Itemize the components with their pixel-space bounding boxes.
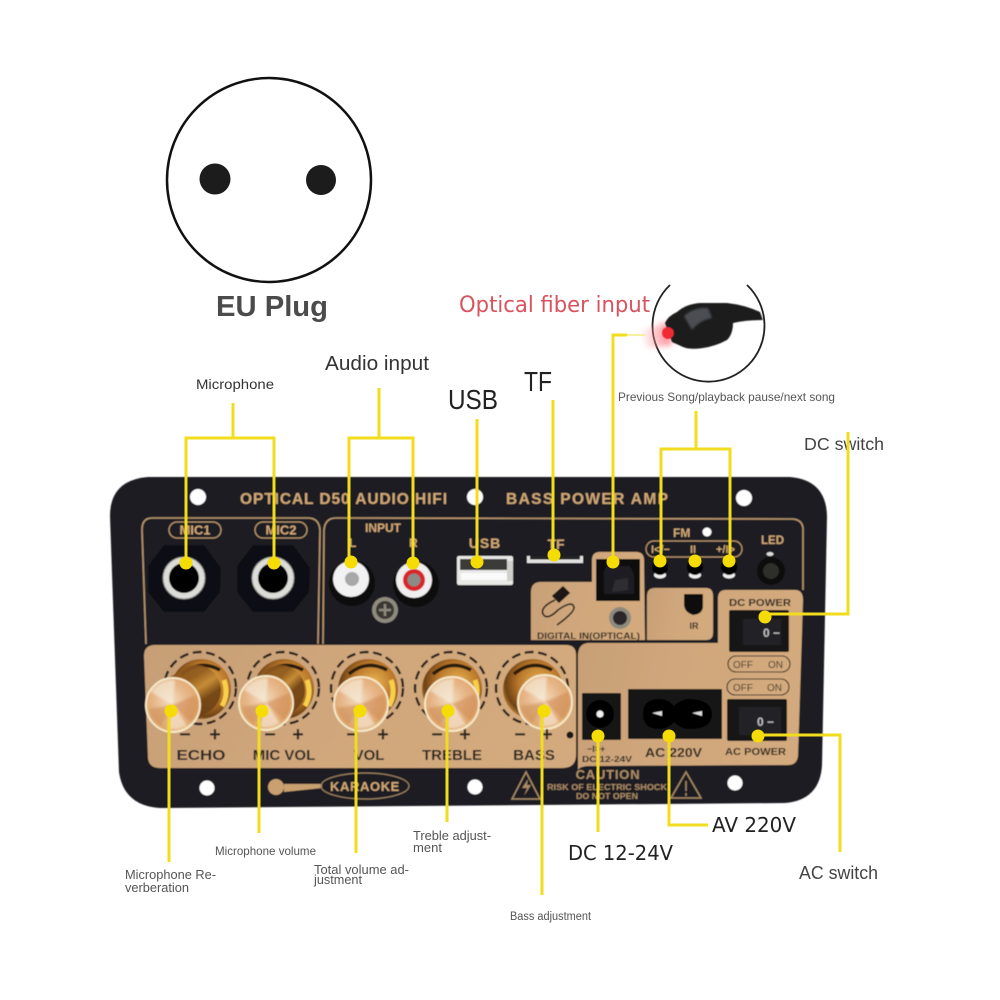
knob labels: BASS <box>513 747 555 764</box>
label: Total volume adjustment: justment <box>313 873 363 887</box>
caution text <box>547 767 667 801</box>
LED indicator: LED <box>761 535 784 547</box>
line: audio input bracket <box>349 388 413 563</box>
line: mic volume <box>258 711 260 833</box>
board title <box>240 491 668 508</box>
INPUT labels: R <box>409 536 418 550</box>
label: TF: TF <box>524 366 552 397</box>
line: AC switch <box>758 735 840 852</box>
caution text: CAUTION <box>576 767 640 782</box>
LED indicator <box>757 535 785 585</box>
label: Bass adjustment: Bass adjustment <box>510 911 592 923</box>
plus minus marks: + <box>541 724 553 746</box>
line: TF <box>552 400 554 555</box>
line: echo <box>168 711 170 862</box>
label: USB: USB <box>448 384 498 415</box>
karaoke badge: KARAOKE <box>330 779 400 794</box>
AC socket <box>628 689 722 739</box>
IR sensor: IR <box>690 621 699 631</box>
knob: ECHO <box>146 652 236 732</box>
label: DC switch: DC switch <box>804 434 884 454</box>
heading: EU Plug: EU Plug <box>216 291 328 323</box>
USB port <box>457 556 513 585</box>
label: Total volume adjustment: Total volume ad- <box>314 863 409 877</box>
FM button group: +/I> <box>716 544 735 556</box>
line: treble <box>446 711 448 822</box>
AC POWER label: AC POWER <box>725 746 786 758</box>
TF slot <box>527 556 583 563</box>
RCA jack L <box>329 560 375 606</box>
plus minus marks: − <box>346 724 358 746</box>
DC polarity label: DC 12-24V <box>582 754 632 764</box>
plus minus marks: + <box>459 724 471 746</box>
knob labels: VOL <box>354 747 384 764</box>
OFF ON pills: OFF <box>733 683 753 694</box>
plus minus marks: − <box>264 724 276 746</box>
gold IR panel <box>647 588 713 640</box>
line: bass <box>540 711 544 895</box>
FM button group: FM <box>673 526 690 540</box>
jack: MIC2 <box>237 545 310 612</box>
line: USB <box>476 419 478 563</box>
plus minus marks <box>179 724 553 746</box>
gold digital input panel <box>531 552 645 640</box>
IR sensor <box>684 594 703 631</box>
line: fiber fade <box>625 334 645 336</box>
icon: general warning triangle <box>671 772 701 798</box>
callout lines <box>169 335 848 895</box>
DC polarity label: −I=+ <box>587 744 605 754</box>
label: Treble adjustment: ment <box>413 841 443 855</box>
line: DC switch <box>765 432 848 614</box>
DIGITAL IN label: DIGITAL IN(OPTICAL) <box>537 631 640 642</box>
icon: optical fiber connector in circle <box>640 285 765 382</box>
plus minus marks: + <box>292 724 304 746</box>
caution text: DO NOT OPEN <box>576 792 638 801</box>
icon: digital cable <box>542 587 574 625</box>
OFF ON pills <box>727 656 790 695</box>
optical socket <box>596 559 640 601</box>
line: microphone bracket <box>186 403 274 563</box>
AC 220V label: AC 220V <box>645 745 702 760</box>
knob: VOL <box>331 652 403 731</box>
knob: BASS <box>496 652 572 729</box>
screw <box>372 597 398 623</box>
DC rocker switch <box>729 610 789 652</box>
line: total volume <box>354 711 358 853</box>
section outlines <box>142 518 803 644</box>
RCA jack R <box>393 561 439 607</box>
gold power panel <box>578 590 803 770</box>
OFF ON pills: OFF <box>733 660 753 671</box>
jack: MIC1 <box>148 545 221 612</box>
label: Treble adjustment <box>413 829 491 855</box>
line: playback buttons bracket <box>661 411 730 562</box>
board plate <box>110 477 827 808</box>
label: Microphone volume: Microphone volume <box>215 844 316 858</box>
MIC labels: MIC1 <box>179 522 211 538</box>
DC rocker switch: 0 − <box>763 626 780 640</box>
label: Treble adjustment: Treble adjust- <box>413 829 491 843</box>
label: DC 12-24V: DC 12-24V <box>568 841 673 865</box>
line: optical fiber <box>613 335 627 562</box>
DC jack <box>582 693 621 740</box>
plus minus marks: + <box>377 724 389 746</box>
label: Previous song/playback: Previous Song/playback pause/next song <box>618 390 835 404</box>
FM button group: II <box>690 544 696 556</box>
board title: OPTICAL D50 AUDIO HIFI <box>240 491 447 508</box>
callout dots <box>164 548 772 742</box>
label: Microphone: Microphone <box>196 376 274 392</box>
INPUT labels <box>349 521 418 550</box>
AC rocker switch: 0 − <box>757 715 774 729</box>
plus minus marks: + <box>209 724 221 746</box>
OFF ON pills: ON <box>768 660 783 671</box>
knob labels <box>176 747 555 764</box>
label: AV 220V: AV 220V <box>712 813 796 837</box>
karaoke badge <box>321 773 409 799</box>
label: AC switch: AC switch <box>799 863 878 883</box>
plus minus marks: − <box>431 724 443 746</box>
knob labels: ECHO <box>176 747 226 764</box>
knob labels: TREBLE <box>422 747 482 764</box>
EU plug icon <box>167 78 371 282</box>
caution text: RISK OF ELECTRIC SHOCK <box>547 783 667 792</box>
label: Total volume adjustment <box>313 863 409 887</box>
label: Optical fiber input: Optical fiber input <box>459 293 650 318</box>
knob: MIC VOL <box>239 652 319 730</box>
board title: BASS POWER AMP <box>506 491 668 508</box>
INPUT labels: L <box>349 536 356 550</box>
MIC labels <box>169 522 307 538</box>
DC polarity label <box>582 744 632 764</box>
amplifier board <box>110 477 827 808</box>
INPUT labels: INPUT <box>365 521 402 535</box>
label: Microphone Reverberation: verberation <box>125 881 189 895</box>
USB label: USB <box>469 535 501 551</box>
knob: TREBLE <box>415 652 487 731</box>
OFF ON pills: ON <box>767 683 782 694</box>
FM button group <box>646 526 742 578</box>
DC POWER label: DC POWER <box>729 597 791 609</box>
line: DC 12-24V <box>596 736 600 832</box>
label: Audio input: Audio input <box>325 352 429 375</box>
MIC labels: MIC2 <box>265 522 297 538</box>
label: Microphone Reverberation <box>125 868 216 895</box>
small input jack <box>609 607 631 629</box>
icon: electric warning triangle <box>512 772 540 799</box>
FM button group: I</− <box>651 544 670 556</box>
label: Microphone Reverberation: Microphone Re- <box>125 868 216 882</box>
plus minus marks: − <box>514 724 526 746</box>
icon: karaoke microphone <box>268 779 322 795</box>
knob labels: MIC VOL <box>253 747 315 764</box>
AC rocker switch <box>727 699 787 741</box>
gold control panel left <box>144 645 576 768</box>
mounting holes <box>190 489 752 796</box>
TF label: TF <box>547 536 565 552</box>
plus minus marks: − <box>179 724 191 746</box>
line: AV 220V <box>669 736 708 825</box>
